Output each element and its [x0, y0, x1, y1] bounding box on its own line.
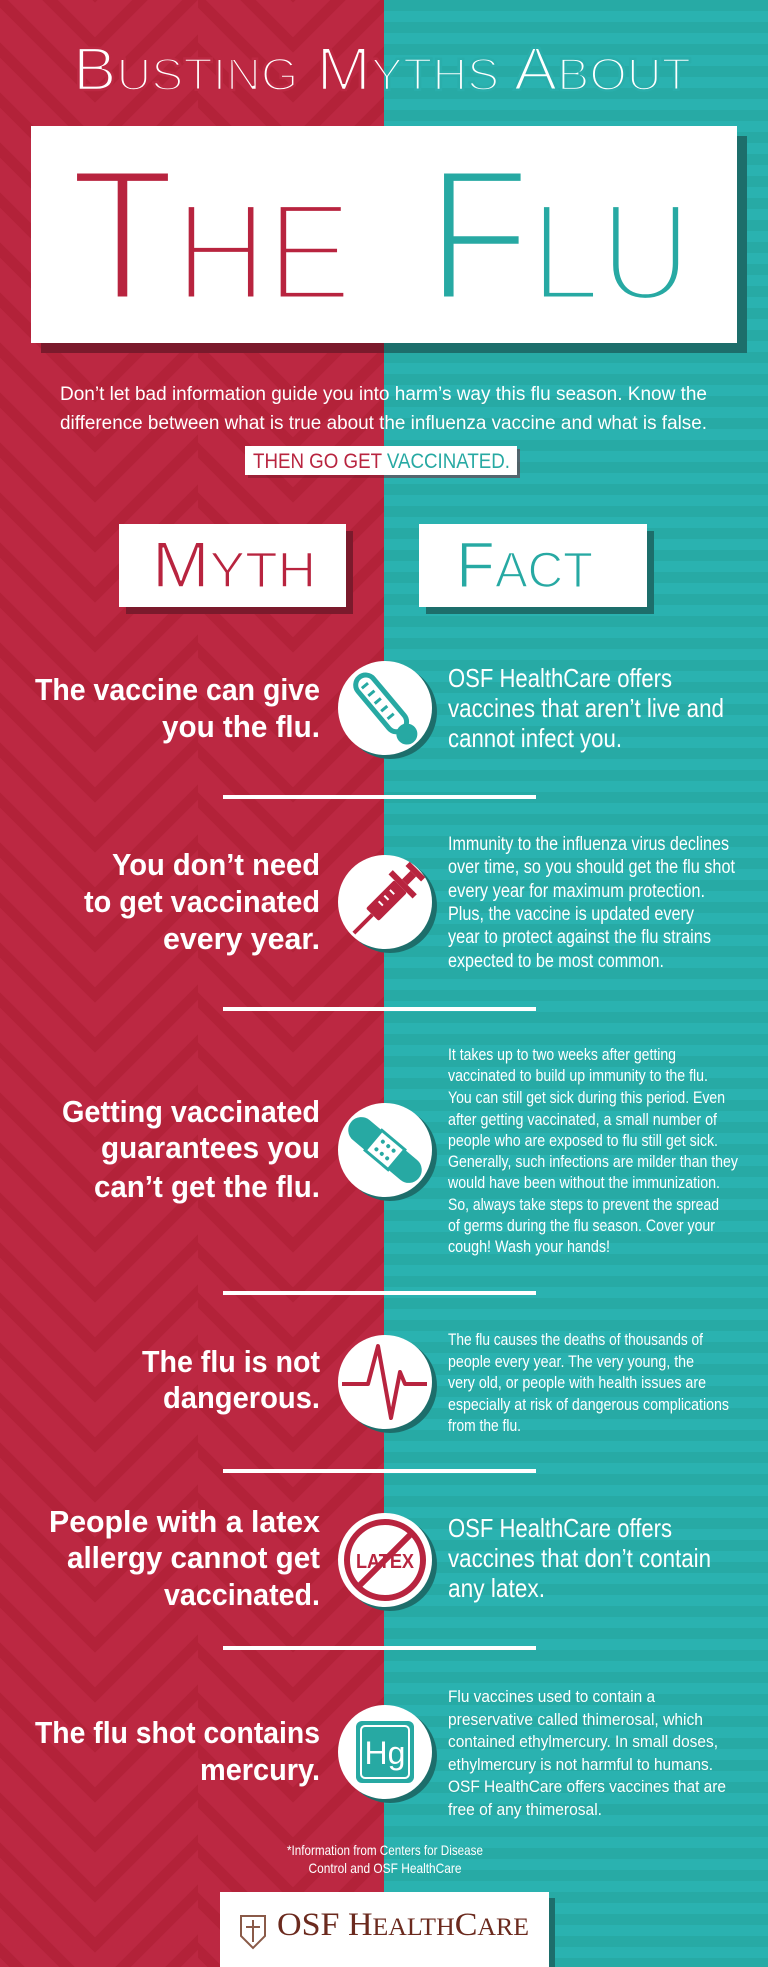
row 4: fact	[448, 1330, 729, 1435]
callout button: then go get vaccinated	[245, 446, 520, 478]
row 1: myth: you the flu.	[162, 709, 320, 744]
row 2: fact: expected to be most common.	[448, 951, 664, 972]
footnote	[287, 1842, 483, 1876]
row 4: fact: very old, or people with health issues are	[448, 1373, 706, 1392]
row 3: fact: cough! Wash your hands!	[448, 1237, 610, 1256]
title: busting myths about	[78, 47, 689, 92]
logo box: OSF HealthCare: OSF HEALTHCARE	[277, 1907, 529, 1943]
row 6: myth: mercury.	[200, 1752, 320, 1787]
row 3: myth: Getting vaccinated	[62, 1094, 320, 1129]
icon: mercury Hg: Hg	[365, 1735, 405, 1771]
row 4: myth	[142, 1344, 320, 1415]
row 6: fact: free of any thimerosal.	[448, 1800, 602, 1819]
heading: fact: FACT	[456, 528, 593, 601]
callout button: then go get vaccinated: THEN GO GET VACCINATED.	[253, 450, 510, 473]
icon: mercury Hg	[338, 1705, 437, 1803]
row 2: fact: every year for maximum protection.	[448, 881, 705, 902]
row 1: fact: OSF HealthCare offers	[448, 663, 672, 693]
row 5: myth: allergy cannot get	[67, 1540, 320, 1575]
heading: myth	[119, 524, 353, 614]
icon: no latex: LATEX	[356, 1551, 415, 1573]
row 1: fact: vaccines that aren’t live and	[448, 693, 724, 723]
footnote: Control and OSF HealthCare	[308, 1860, 462, 1876]
row 4: myth: dangerous.	[163, 1380, 320, 1415]
title box: the flu: FLU	[427, 130, 691, 341]
row 2: fact: Plus, the vaccine is updated every	[448, 904, 694, 925]
heading: myth: MYTH	[152, 528, 316, 601]
row 3: fact: So, always take steps to prevent the spread	[448, 1195, 719, 1214]
row 2: myth: every year.	[163, 921, 320, 956]
intro text: difference between what is true about the influenza vaccine and what is false.	[60, 413, 707, 434]
row 2: myth: You don’t need	[112, 847, 320, 882]
row 3: fact: of germs during the flu season. Cover your	[448, 1216, 715, 1235]
row 3: fact: after getting vaccinated, a small number of	[448, 1110, 717, 1129]
row 2: myth: to get vaccinated	[84, 884, 320, 919]
row 3: fact: vaccinated to build up immunity to the flu.	[448, 1066, 708, 1085]
row 2: fact	[448, 834, 736, 972]
row 4: fact: from the flu.	[448, 1416, 521, 1435]
row 6: myth	[35, 1715, 320, 1787]
row 1: fact	[448, 663, 724, 753]
row 4: fact: people every year. The very young, the	[448, 1352, 694, 1371]
row 3: fact: would have been without the immunization.	[447, 1173, 720, 1192]
row 6: fact: Flu vaccines used to contain a	[448, 1687, 655, 1706]
row 3: fact: It takes up to two weeks after getting	[448, 1045, 676, 1064]
title: busting myths about: BUSTING MYTHS ABOUT	[73, 35, 691, 103]
row 5: fact	[448, 1513, 711, 1603]
row 6: fact: preservative called thimerosal, which	[448, 1710, 703, 1729]
row 4: fact: The flu causes the deaths of thousands of	[448, 1330, 703, 1349]
background: myth side	[0, 0, 384, 1967]
footnote: *Information from Centers for Disease	[287, 1842, 483, 1858]
row 5: fact: OSF HealthCare offers	[448, 1513, 672, 1543]
row 4: myth: The flu is not	[142, 1344, 320, 1379]
row 5: myth: People with a latex	[49, 1504, 321, 1539]
icon: syringe	[338, 855, 437, 953]
row 3: fact	[447, 1045, 738, 1256]
icon: heartbeat	[338, 1335, 437, 1433]
title box: the flu	[31, 126, 747, 353]
row 3: fact: people who are exposed to flu still get sick.	[448, 1131, 718, 1150]
row 6: fact: OSF HealthCare offers vaccines that are	[448, 1777, 726, 1796]
background: fact side	[384, 0, 768, 1967]
row 2: myth	[84, 847, 320, 956]
row 6: fact	[448, 1687, 726, 1819]
intro text: Don’t let bad information guide you into harm’s way this flu season. Know the	[60, 384, 707, 405]
row 1: myth	[35, 672, 320, 744]
title box: the flu: THE	[70, 130, 352, 341]
row 6: fact: ethylmercury is not harmful to humans.	[448, 1755, 713, 1774]
icon: bandage	[338, 1103, 437, 1201]
logo box: OSF HealthCare	[220, 1892, 555, 1967]
icon: no latex	[338, 1513, 437, 1611]
icon: thermometer	[338, 661, 437, 759]
icon: crest	[241, 1916, 265, 1948]
row 3: myth: guarantees you	[101, 1130, 320, 1165]
title: busting myths about: BUSTING MYTHS ABOUT	[73, 35, 691, 103]
row 5: fact: any latex.	[448, 1573, 545, 1603]
row 2: fact: year to protect against the flu strains	[448, 927, 711, 948]
row 1: myth: The vaccine can give	[35, 672, 320, 707]
intro text	[60, 384, 707, 434]
row 1: fact: cannot infect you.	[448, 723, 622, 753]
row 3: myth	[62, 1094, 320, 1204]
row 5: myth	[49, 1504, 321, 1612]
row 6: myth: The flu shot contains	[35, 1715, 320, 1750]
row 3: myth: can’t get the flu.	[94, 1169, 320, 1204]
row 5: myth: vaccinated.	[164, 1577, 320, 1612]
row 6: fact: contained ethylmercury. In small doses,	[448, 1732, 718, 1751]
row 5: fact: vaccines that don’t contain	[448, 1543, 711, 1573]
heading: fact	[419, 524, 654, 614]
